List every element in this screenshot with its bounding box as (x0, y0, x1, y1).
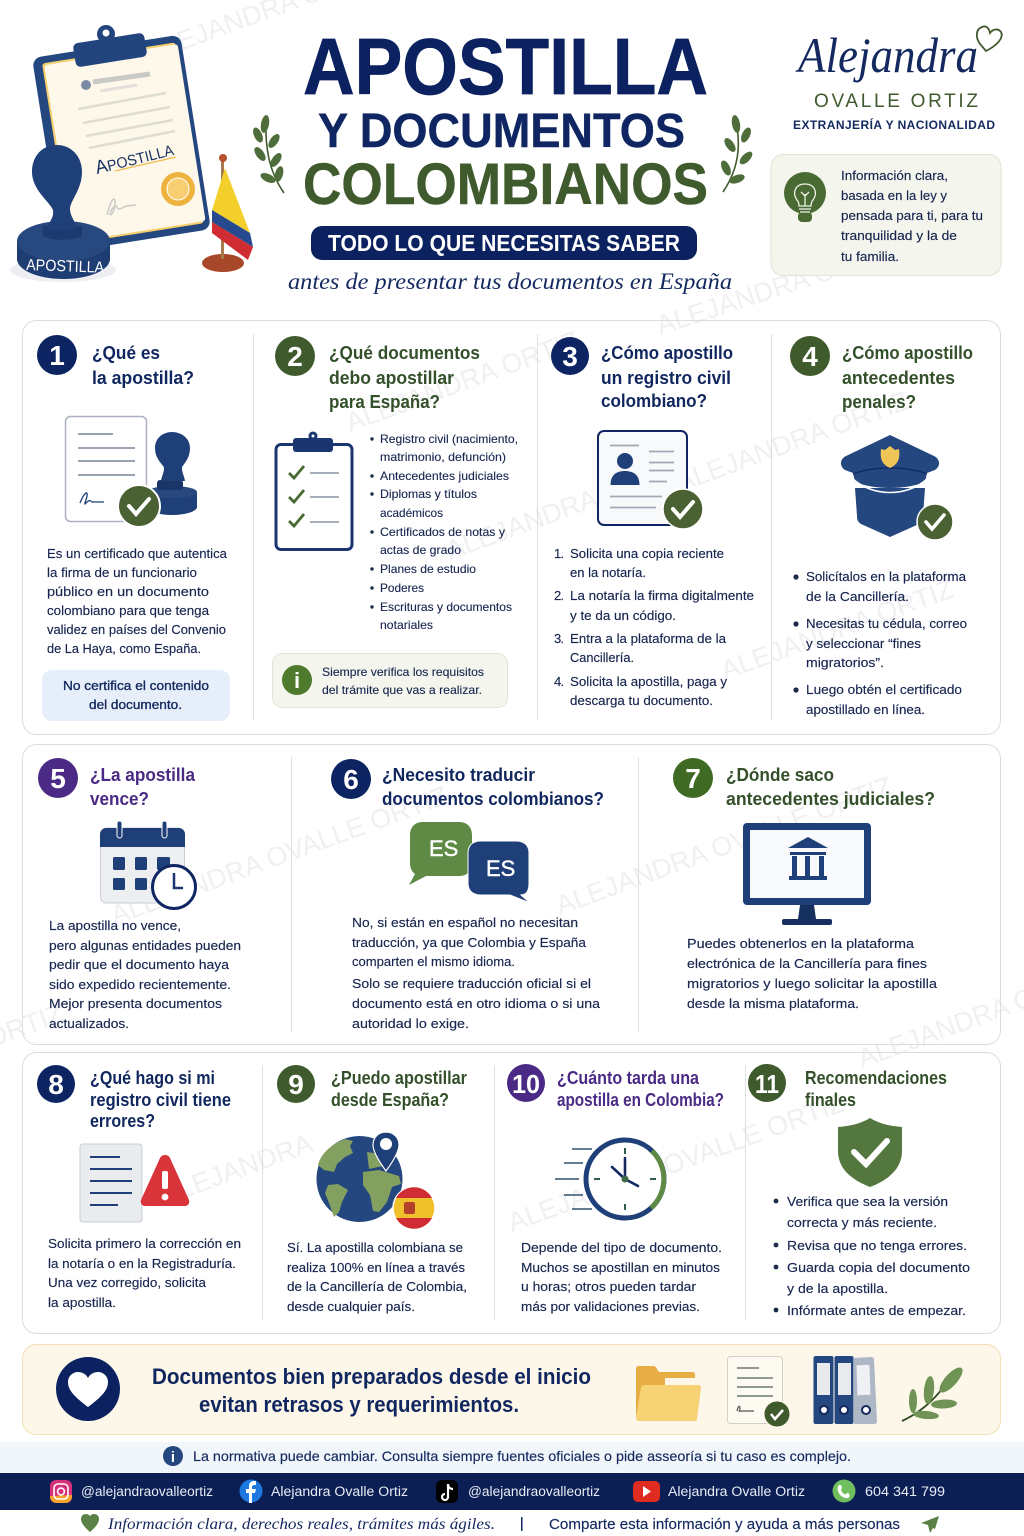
section 3: registro civil: ¿Cómo apostillo (601, 343, 733, 363)
section 7: antecedentes judiciales: antecedentes judiciales? (726, 789, 935, 809)
panel: row 3 (22, 1052, 1000, 1334)
section 6: traducir documentos: ¿Necesito traducir (382, 765, 535, 785)
document list: Poderes (380, 581, 424, 595)
section 6: traducir documentos (331, 759, 604, 1031)
banner: documentos bien preparados (22, 1344, 1000, 1434)
illustration: clipboard, stamp and flag (10, 25, 253, 282)
note: verifica los requisitos: i (294, 668, 300, 693)
footer bar: social media: @alejandraovalleortiz (81, 1484, 213, 1499)
section 1: qué es la apostilla: validez en países del Convenio (47, 622, 226, 637)
note: no certifica el contenido: No certifica el contenido (63, 678, 209, 693)
icon: tiktok (436, 1480, 458, 1503)
icon: paper plane (921, 1516, 939, 1533)
title: APOSTILLA (303, 22, 708, 111)
seal (161, 172, 195, 206)
section 10: cuánto tarda: Depende del tipo de documento. (521, 1240, 722, 1255)
text: ALEJANDRA ORTIZ (717, 573, 958, 686)
info bar: normativa: i (171, 1449, 175, 1466)
document list: académicos (380, 506, 443, 520)
note: verifica los requisitos: del trámite que vas a realizar. (322, 683, 482, 697)
section 9: desde España: ¿Puedo apostillar (331, 1068, 467, 1088)
banner: documentos bien preparados: Documentos bien preparados desde el inicio (152, 1364, 591, 1389)
section 5: la apostilla vence: pero algunas entidades pueden (49, 938, 241, 953)
section 4: antecedentes penales: antecedentes (842, 368, 955, 388)
section 5: la apostilla vence: ¿La apostilla (90, 765, 196, 785)
document list: Escrituras y documentos (380, 600, 512, 614)
callout: información clara: basada en la ley y (841, 188, 948, 203)
note: verifica los requisitos: Siempre verifica los requisitos (322, 665, 484, 679)
section 11: recomendaciones finales (748, 1064, 970, 1318)
section 3: registro civil: en la notaría. (570, 565, 646, 580)
document list: Diplomas y títulos (380, 487, 477, 501)
text: ALEJANDRA ORTIZ (672, 385, 913, 498)
section 8: errores en el registro: Una vez corregido, solicita (48, 1275, 207, 1290)
icon: globe with pin and Spain flag (316, 1132, 435, 1229)
section 1: qué es la apostilla: Es un certificado que autentica (47, 546, 228, 561)
info bar: normativa (0, 1442, 1024, 1473)
section 2: qué documentos (272, 336, 518, 708)
section 8: errores en el registro: ¿Qué hago si mi (90, 1068, 215, 1088)
icon: ES speech bubbles (409, 822, 530, 903)
section 8: errores en el registro: registro civil tiene (90, 1090, 231, 1110)
section 7: antecedentes judiciales: 7 (685, 763, 701, 794)
text: ALEJANDRA ORTIZ (342, 325, 583, 438)
icon: clock with speed lines (555, 1140, 664, 1218)
section 10: cuánto tarda: ¿Cuánto tarda una (557, 1068, 700, 1088)
section 11: recomendaciones finales: 11 (755, 1069, 779, 1099)
document list: actas de grado (380, 543, 461, 557)
section 7: antecedentes judiciales: ¿Dónde saco (726, 765, 834, 785)
icon: heart (56, 1357, 120, 1421)
section 3: registro civil: Solicita la apostilla, paga y (570, 674, 728, 689)
section 4: antecedentes penales: 4 (802, 341, 818, 372)
section 4: antecedentes penales: de la Cancillería. (806, 589, 909, 604)
section 1: qué es la apostilla: la apostilla? (92, 368, 194, 388)
section 2: qué documentos: debo apostillar (329, 368, 454, 388)
section 7: antecedentes judiciales: Puedes obtenerlos en la plataforma (687, 936, 915, 951)
section 8: errores en el registro: la apostilla. (48, 1295, 116, 1310)
section 7: antecedentes judiciales: migratorios y luego solicitar la apostilla (687, 976, 938, 991)
section 5: la apostilla vence (38, 758, 241, 1031)
section 7: antecedentes judiciales (673, 758, 938, 1011)
section 6: traducir documentos: documento está en otro idioma o si una (352, 996, 601, 1011)
flag (202, 154, 253, 272)
section 5: la apostilla vence: La apostilla no vence, (49, 918, 181, 933)
section 9: desde España: 9 (288, 1069, 304, 1100)
logo: Alejandra (795, 27, 978, 83)
section 11: recomendaciones finales: Recomendaciones (805, 1068, 947, 1088)
section 11: recomendaciones finales: Infórmate antes de empezar. (787, 1303, 966, 1318)
footer bar: social media: 604 341 799 (865, 1484, 945, 1499)
section 1: qué es la apostilla: colombiano para que tenga (47, 603, 210, 618)
section 5: la apostilla vence: sido expedido recientemente. (49, 977, 231, 992)
section 9: desde España: realiza 100% en línea a través (287, 1260, 466, 1275)
icon: left laurel (251, 114, 285, 193)
section 10: cuánto tarda: 10 (512, 1069, 540, 1099)
section 4: antecedentes penales: y seleccionar “fines (806, 636, 922, 651)
section 11: recomendaciones finales: finales (805, 1090, 856, 1110)
logo: OVALLE ORTIZ (814, 91, 978, 112)
section 4: antecedentes penales: Solicítalos en la plataforma (806, 569, 967, 584)
icon: heart outline (977, 26, 1002, 51)
section 6: traducir documentos: documentos colombianos? (382, 789, 604, 809)
icon: light bulb (784, 172, 826, 222)
section 6: traducir documentos: traducción, ya que Colombia y España (352, 935, 587, 950)
note: verifica los requisitos (272, 654, 508, 708)
section 3: registro civil: La notaría la firma digitalmente (570, 588, 754, 603)
icon: monitor with courthouse (743, 823, 871, 925)
stamp (17, 145, 110, 279)
section 2: qué documentos: 2 (287, 341, 303, 372)
section 3: registro civil: Solicita una copia reciente (570, 546, 724, 561)
subtitle pill: TODO LO QUE NECESITAS SABER (328, 230, 680, 256)
section 6: traducir documentos: autoridad lo exige. (352, 1016, 469, 1031)
section 4: antecedentes penales (790, 336, 973, 717)
section 4: antecedentes penales: apostillado en línea. (806, 702, 925, 717)
section 2: qué documentos: ¿Qué documentos (329, 343, 480, 363)
section 3: registro civil: y te da un código. (570, 608, 676, 623)
section 5: la apostilla vence: Mejor presenta documentos (49, 996, 223, 1011)
section 8: errores en el registro: errores? (90, 1111, 155, 1131)
section 5: la apostilla vence: actualizados. (49, 1016, 129, 1031)
document list: matrimonio, defunción) (380, 450, 506, 464)
section 1: qué es la apostilla: de La Haya, como España. (47, 641, 201, 656)
section 3: registro civil: Cancillería. (570, 650, 634, 665)
section 3: registro civil: 3. (554, 631, 564, 646)
section 3: registro civil: 1. (554, 546, 564, 561)
section 3: registro civil: colombiano? (601, 391, 707, 411)
title: COLOMBIANOS (303, 152, 708, 217)
section 10: cuánto tarda: más por validaciones previas. (521, 1299, 700, 1314)
callout: información clara: pensada para ti, para tu (841, 208, 983, 223)
icon: civil registry with check (598, 431, 703, 529)
logo: EXTRANJERÍA Y NACIONALIDAD (793, 117, 995, 132)
note: no certifica el contenido (42, 670, 230, 721)
section 11: recomendaciones finales: Guarda copia del documento (787, 1260, 970, 1275)
section 9: desde España (277, 1065, 467, 1314)
icon: ES speech bubbles: ES (429, 836, 458, 861)
section 6: traducir documentos: No, si están en español no necesitan (352, 915, 578, 930)
icon: shield with check (838, 1118, 902, 1187)
section 7: antecedentes judiciales: electrónica de la Cancillería para fines (687, 956, 928, 971)
section 4: antecedentes penales: ¿Cómo apostillo (842, 343, 973, 363)
section 10: cuánto tarda: u horas; otros pueden tardar (521, 1279, 697, 1294)
section 3: registro civil: descarga tu documento. (570, 693, 713, 708)
icon: youtube (633, 1481, 660, 1502)
icon: olive branch (902, 1364, 966, 1421)
text: ALEJANDRA OVALLE ORTIZ (504, 1088, 849, 1238)
section 6: traducir documentos: Solo se requiere traducción oficial si el (352, 976, 591, 991)
section 1: qué es la apostilla: ¿Qué es (92, 343, 160, 363)
footer bar: social media: @alejandraovalleortiz (468, 1484, 600, 1499)
panel: row 2 (22, 744, 1000, 1044)
section 6: traducir documentos: 6 (343, 764, 359, 795)
text: ALEJANDRA OVALLE ORTIZ (653, 202, 1001, 341)
section 11: recomendaciones finales: Revisa que no tenga errores. (787, 1238, 967, 1253)
section 1: qué es la apostilla (37, 335, 230, 721)
section 1: qué es la apostilla: 1 (49, 340, 65, 371)
footer bar: social media: Alejandra Ovalle Ortiz (271, 1484, 408, 1499)
icon: police cap with check (841, 435, 953, 540)
section 10: cuánto tarda: apostilla en Colombia? (557, 1090, 724, 1110)
section 5: la apostilla vence: 5 (50, 763, 66, 794)
section 9: desde España: de la Cancillería de Colombia, (287, 1279, 467, 1294)
icon: checklist clipboard (276, 432, 352, 550)
callout: información clara: Información clara, (841, 168, 948, 183)
section 3: registro civil (551, 337, 754, 708)
section 4: antecedentes penales: penales? (842, 392, 916, 412)
section 6: traducir documentos: comparten el mismo idioma. (352, 954, 515, 969)
section 11: recomendaciones finales: Verifica que sea la versión (787, 1194, 948, 1209)
document list: Certificados de notas y (380, 525, 505, 539)
text: ALEJANDRA (157, 1128, 317, 1211)
section 11: recomendaciones finales: correcta y más reciente. (787, 1215, 937, 1230)
closing strip: Comparte esta información y ayuda a más personas (549, 1517, 900, 1533)
info bar: normativa: La normativa puede cambiar. Consulta siempre fuentes oficiales o pide asseoría si tu caso es complejo. (193, 1448, 851, 1464)
closing strip: Información clara, derechos reales, trámites más ágiles. (107, 1516, 495, 1533)
section 3: registro civil: un registro civil (601, 368, 731, 388)
section 4: antecedentes penales: Luego obtén el certificado (806, 682, 962, 697)
stamp: APOSTILLA (26, 257, 105, 277)
logo (793, 26, 1002, 132)
section 8: errores en el registro: la notaría o en la Registraduría. (48, 1256, 236, 1271)
document list (370, 432, 518, 632)
section 9: desde España: Sí. La apostilla colombiana se (287, 1240, 463, 1255)
footer bar: social media: Alejandra Ovalle Ortiz (668, 1484, 805, 1499)
section 2: qué documentos: para España? (329, 392, 440, 412)
footer bar: social media (0, 1473, 1024, 1510)
section 3: registro civil: Entra a la plataforma de la (570, 631, 727, 646)
section 3: registro civil: 4. (554, 674, 564, 689)
title: Y DOCUMENTOS (318, 105, 685, 158)
icon: instagram (50, 1480, 72, 1503)
icon: right laurel (719, 114, 754, 192)
section 1: qué es la apostilla: público en un documento (47, 584, 209, 599)
section 8: errores en el registro: Solicita primero la corrección en (48, 1236, 241, 1251)
callout: información clara: tranquilidad y la de (841, 228, 957, 243)
section 11: recomendaciones finales: y de la apostilla. (787, 1281, 888, 1296)
section 8: errores en el registro (37, 1065, 241, 1310)
text: ALEJANDRA OVALLE ORTIZ (107, 781, 452, 931)
banner: documentos bien preparados: evitan retrasos y requerimientos. (199, 1392, 519, 1417)
icon: ES speech bubbles: ES (486, 856, 515, 881)
section 4: antecedentes penales: Necesitas tu cédula, correo (806, 616, 967, 631)
document list: notariales (380, 618, 433, 632)
section 5: la apostilla vence: pedir que el documento haya (49, 957, 230, 972)
section 3: registro civil: 3 (562, 341, 578, 372)
section 8: errores en el registro: 8 (48, 1069, 64, 1100)
icon: whatsapp (832, 1480, 856, 1502)
section 10: cuánto tarda: Muchos se apostillan en minutos (521, 1260, 721, 1275)
section 5: la apostilla vence: vence? (90, 789, 149, 809)
text: ALEJANDRA OVALLE ORTIZ (552, 771, 897, 921)
closing strip (81, 1514, 939, 1533)
icon: facebook (240, 1480, 262, 1503)
icon: document with stamp (66, 416, 197, 527)
icon: folder (636, 1366, 701, 1421)
icon: calendar with clock (100, 821, 196, 908)
section 3: registro civil: 2. (554, 588, 564, 603)
callout: información clara: tu familia. (841, 249, 899, 264)
section 9: desde España: desde España? (331, 1090, 449, 1110)
section 4: antecedentes penales: migratorios”. (806, 655, 884, 670)
section 9: desde España: desde cualquier país. (287, 1299, 415, 1314)
document list: Registro civil (nacimiento, (380, 432, 518, 446)
title (303, 22, 708, 217)
document list: Planes de estudio (380, 562, 476, 576)
section 10: cuánto tarda (507, 1064, 724, 1314)
section 7: antecedentes judiciales: desde la misma plataforma. (687, 996, 859, 1011)
tagline: antes de presentar tus documentos en España (288, 269, 732, 294)
illustration: clipboard, stamp and flag: APOSTILLA (93, 139, 176, 179)
icon: document with warning (80, 1144, 189, 1222)
text: ALEJANDRA ORTIZ (442, 453, 683, 566)
note: no certifica el contenido: del documento. (89, 697, 182, 712)
callout: información clara (771, 154, 1001, 276)
icon: signed document with check (728, 1356, 790, 1427)
panel: row 1 (22, 320, 1000, 734)
document list: Antecedentes judiciales (380, 469, 509, 483)
icon: green heart (81, 1514, 99, 1532)
icon: binders (814, 1356, 877, 1424)
section 1: qué es la apostilla: la firma de un funcionario (47, 565, 197, 580)
